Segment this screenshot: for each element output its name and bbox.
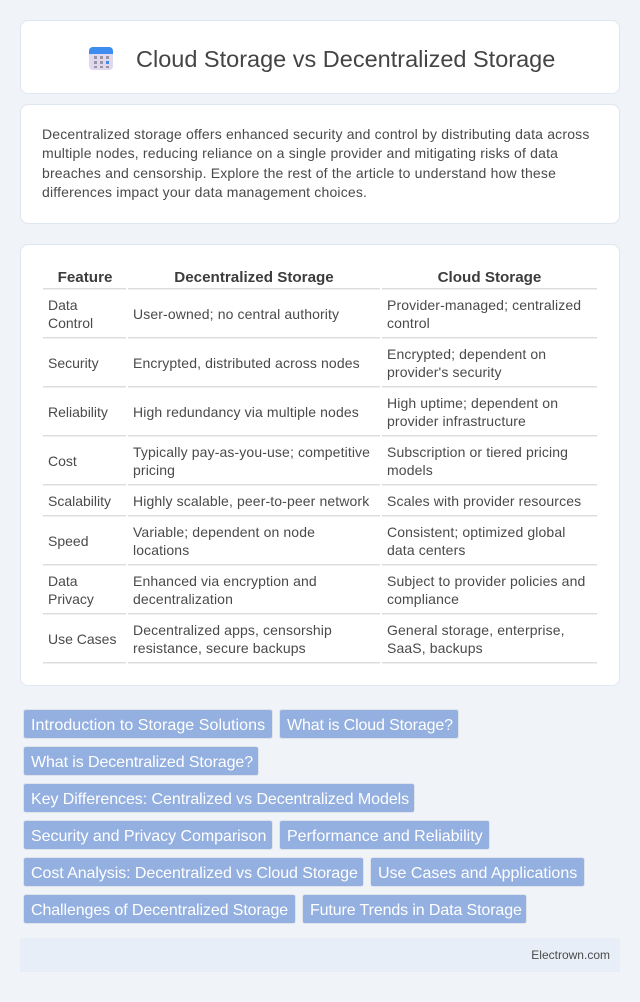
row: speed: locations xyxy=(133,542,189,558)
intro text: Decentralized storage offers enhanced security and control by distributing data across xyxy=(42,126,590,142)
row: data privacy: decentralization xyxy=(133,591,233,607)
icon: calendar grid xyxy=(89,47,113,70)
row: reliability: High redundancy via multiple nodes xyxy=(133,404,359,420)
row: speed: data centers xyxy=(387,542,466,558)
row: data privacy xyxy=(48,573,585,607)
row: cost: models xyxy=(387,462,433,478)
link xyxy=(23,894,296,924)
link xyxy=(23,746,259,776)
link: Challenges of Decentralized Storage xyxy=(31,902,288,919)
row: data control xyxy=(48,297,581,331)
row: data privacy: Enhanced via encryption and xyxy=(133,573,317,589)
footer xyxy=(20,938,620,972)
row: security: Encrypted, distributed across nodes xyxy=(133,355,360,371)
row: reliability xyxy=(48,395,558,429)
row: security: provider's security xyxy=(387,364,502,380)
intro text: differences impact your data management choices. xyxy=(42,184,367,200)
row: speed: Consistent; optimized global xyxy=(387,524,565,540)
row: data control: User-owned; no central authority xyxy=(133,306,339,322)
link xyxy=(302,894,527,924)
link: What is Cloud Storage? xyxy=(287,717,453,734)
row: cost xyxy=(48,444,568,478)
row: security: Security xyxy=(48,355,99,371)
link: Security and Privacy Comparison xyxy=(31,828,266,845)
row: speed xyxy=(48,524,565,558)
link: Future Trends in Data Storage xyxy=(310,902,522,919)
link: Key Differences: Centralized vs Decentralized Models xyxy=(31,791,409,808)
intro text: multiple nodes, reducing reliance on a single provider and mitigating risks of data xyxy=(42,145,558,161)
row: scalability: Highly scalable, peer-to-peer network xyxy=(133,493,369,509)
row: data control: Data xyxy=(48,297,78,313)
intro text xyxy=(42,126,590,200)
row: scalability: Scales with provider resources xyxy=(387,493,581,509)
row: cost: Subscription or tiered pricing xyxy=(387,444,568,460)
row: speed: Variable; dependent on node xyxy=(133,524,315,540)
link: Introduction to Storage Solutions xyxy=(31,717,265,734)
row: data privacy: Privacy xyxy=(48,591,94,607)
row: data privacy: Subject to provider policies and xyxy=(387,573,585,589)
row: data privacy: Data xyxy=(48,573,78,589)
link xyxy=(23,783,415,813)
link: Performance and Reliability xyxy=(287,828,483,845)
link xyxy=(23,820,273,850)
link xyxy=(370,857,585,887)
panel: comparison table xyxy=(20,244,620,686)
row: reliability: High uptime; dependent on xyxy=(387,395,558,411)
row: use cases xyxy=(48,622,565,656)
link xyxy=(279,709,459,739)
link xyxy=(279,820,490,850)
panel: section links xyxy=(23,709,585,924)
row: cost: pricing xyxy=(133,462,175,478)
table header: Cloud Storage xyxy=(438,269,541,286)
row: data control: control xyxy=(387,315,430,331)
row: use cases: SaaS, backups xyxy=(387,640,483,656)
row: use cases: resistance, secure backups xyxy=(133,640,306,656)
table header xyxy=(58,269,541,286)
row: security: Encrypted; dependent on xyxy=(387,346,546,362)
row: data privacy: compliance xyxy=(387,591,459,607)
intro panel xyxy=(20,104,620,224)
intro text: breaches and censorship. Explore the rest of the article to understand how these xyxy=(42,165,556,181)
link: Cost Analysis: Decentralized vs Cloud Storage xyxy=(31,865,358,882)
row: cost: Typically pay-as-you-use; competitive xyxy=(133,444,370,460)
footer credit: Electrown.com xyxy=(531,948,610,962)
row: use cases: General storage, enterprise, xyxy=(387,622,565,638)
row: data control: Provider-managed; centralized xyxy=(387,297,581,313)
row: scalability xyxy=(48,493,581,509)
link xyxy=(23,709,273,739)
row: cost: Cost xyxy=(48,453,77,469)
row: reliability: provider infrastructure xyxy=(387,413,526,429)
row: speed: Speed xyxy=(48,533,88,549)
link: Use Cases and Applications xyxy=(378,865,577,882)
row: security xyxy=(48,346,546,380)
row: data control: Control xyxy=(48,315,93,331)
link xyxy=(23,857,364,887)
table header: Decentralized Storage xyxy=(174,269,334,286)
row: reliability: Reliability xyxy=(48,404,108,420)
title: Cloud Storage vs Decentralized Storage xyxy=(136,46,555,72)
row: scalability: Scalability xyxy=(48,493,111,509)
row: use cases: Use Cases xyxy=(48,631,116,647)
link: What is Decentralized Storage? xyxy=(31,754,253,771)
row: use cases: Decentralized apps, censorship xyxy=(133,622,332,638)
table header: Feature xyxy=(58,269,112,286)
header panel xyxy=(20,20,620,94)
